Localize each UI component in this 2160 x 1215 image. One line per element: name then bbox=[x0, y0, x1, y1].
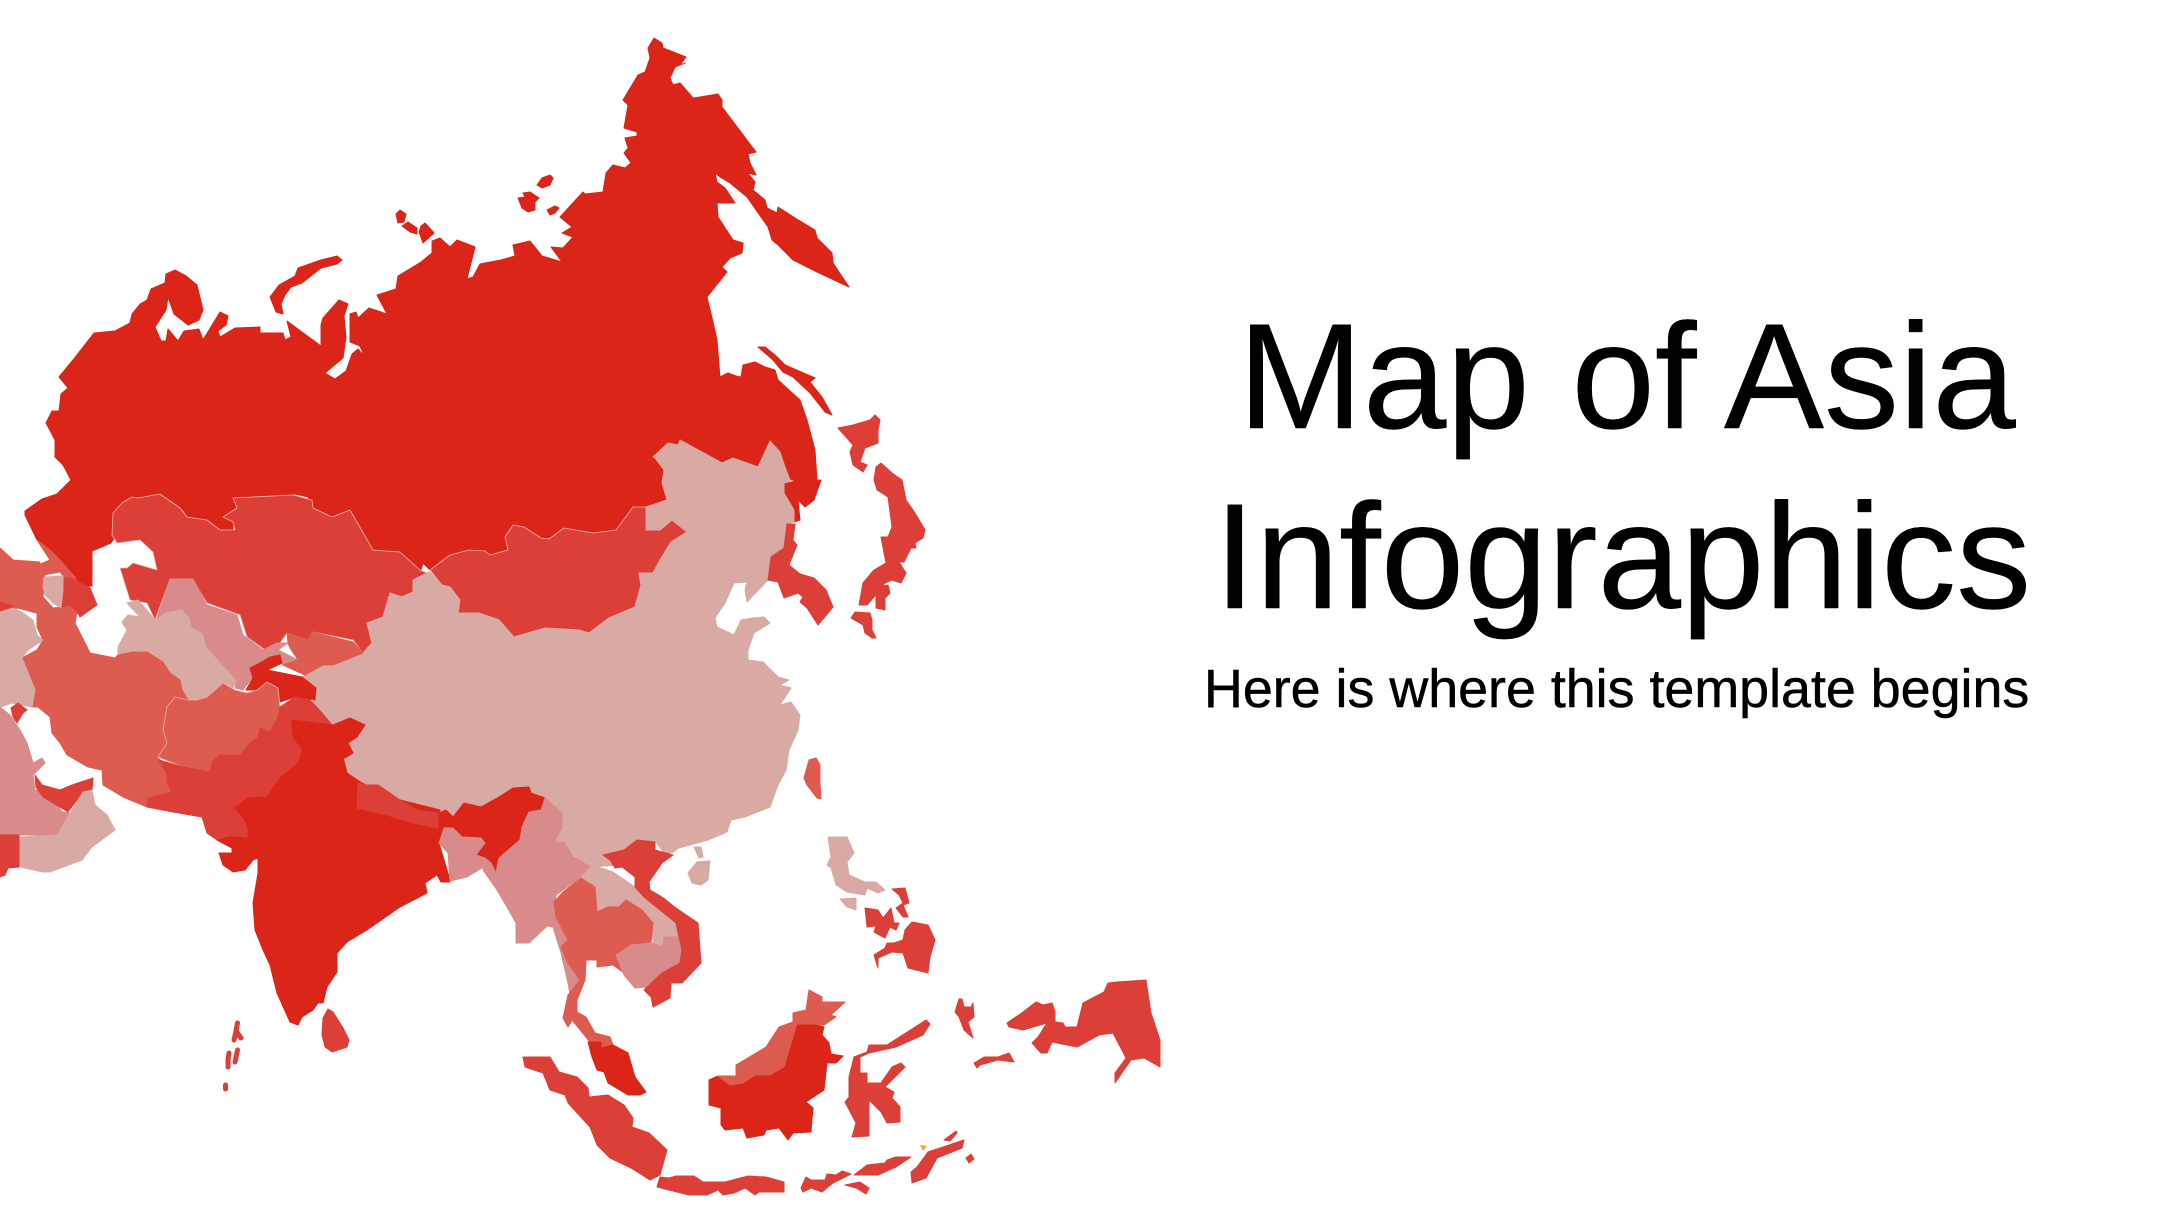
country: Kuwait bbox=[11, 703, 27, 723]
islands: southern Philippines bbox=[865, 888, 935, 973]
country: Vietnam bbox=[603, 840, 701, 1007]
country: UAE bbox=[35, 775, 93, 812]
island: East Timor bbox=[920, 1145, 927, 1151]
country: Laos bbox=[581, 865, 678, 947]
country: Kazakhstan bbox=[112, 494, 427, 653]
country: Cambodia bbox=[616, 937, 682, 988]
country: Myanmar bbox=[483, 798, 591, 995]
country: Turkey bbox=[0, 548, 45, 613]
island: Kalimantan bbox=[709, 1024, 843, 1140]
country: Japan bbox=[838, 415, 925, 638]
island: Taiwan bbox=[804, 758, 821, 799]
region: Sarawak and Sabah bbox=[718, 990, 845, 1085]
country: Thailand bbox=[554, 878, 653, 1048]
country: Pakistan bbox=[147, 697, 332, 840]
island: Sri Lanka bbox=[322, 1009, 349, 1052]
country: Mongolia bbox=[430, 507, 687, 637]
country: India bbox=[217, 718, 545, 1025]
country: China bbox=[302, 440, 800, 867]
country: Iran bbox=[22, 597, 188, 807]
island: Hainan bbox=[688, 847, 710, 885]
country: Bangladesh bbox=[439, 828, 485, 881]
map of Asia bbox=[0, 38, 1160, 1195]
country: Kyrgyzstan bbox=[283, 632, 363, 675]
title: Map of Asia bbox=[1238, 292, 2016, 460]
country: Saudi Arabia bbox=[0, 707, 70, 835]
country: Russia bbox=[25, 38, 849, 587]
country: Yemen bbox=[0, 835, 19, 877]
country: Georgia bbox=[37, 540, 80, 590]
subtitle: Here is where this template begins bbox=[1204, 659, 2029, 719]
country: Nepal bbox=[357, 783, 438, 828]
country: Tajikistan bbox=[246, 655, 316, 702]
country: Armenia bbox=[43, 576, 63, 608]
country: Afghanistan bbox=[158, 682, 280, 772]
country: Korea bbox=[768, 524, 833, 625]
title bbox=[1214, 292, 2031, 640]
islands: Maldives bbox=[226, 1023, 241, 1089]
country: Oman bbox=[20, 790, 115, 872]
islands: northern Philippines bbox=[827, 837, 885, 910]
title: Infographics bbox=[1214, 472, 2031, 640]
country: Azerbaijan bbox=[62, 578, 97, 617]
country: Turkmenistan bbox=[118, 600, 237, 700]
strip: Syria edge bbox=[0, 602, 14, 612]
country: Iraq bbox=[0, 608, 43, 707]
peninsula: Malaysia bbox=[588, 1042, 646, 1095]
country: Uzbekistan bbox=[157, 579, 298, 690]
islands: Indonesia bbox=[523, 980, 1160, 1195]
